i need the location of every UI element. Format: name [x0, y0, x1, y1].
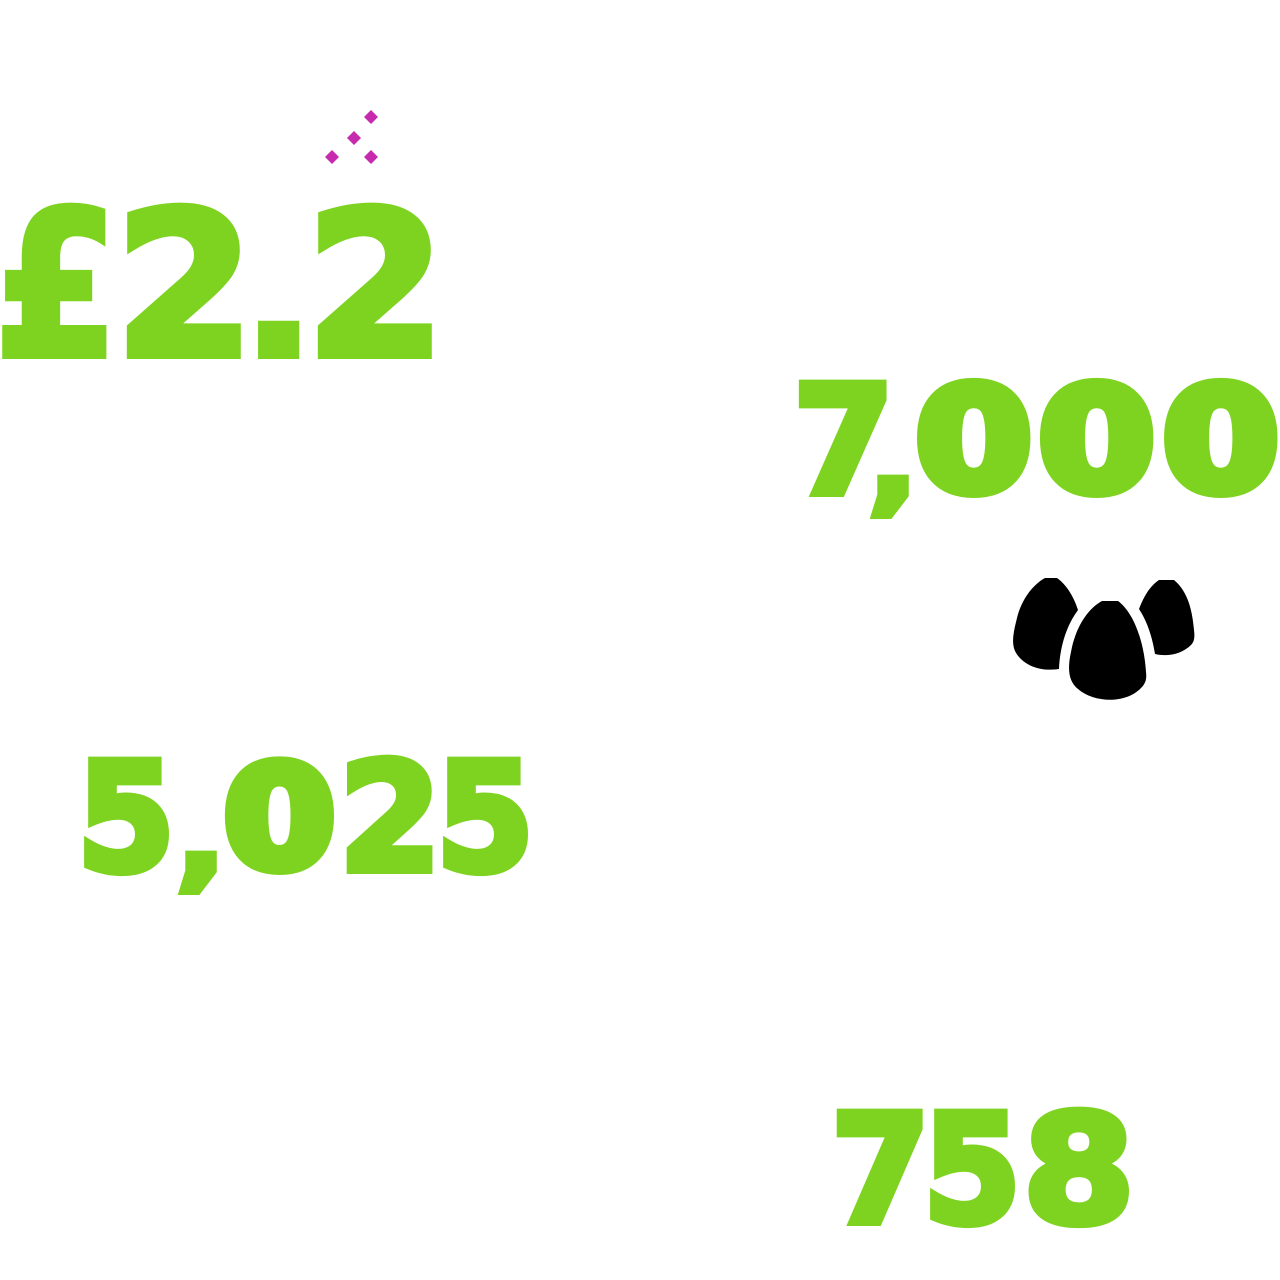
stat: 758: 8: [1023, 1083, 1135, 1258]
stat: 758: [831, 1083, 1135, 1258]
stat: 758: 7: [831, 1083, 930, 1258]
stat: 7,000: 7: [793, 354, 894, 529]
stat: 5,025: 5: [77, 732, 175, 906]
stat: 758: 5: [923, 1084, 1021, 1258]
stat: 5,025: 5: [436, 732, 534, 906]
stat: 5,025: [77, 732, 534, 906]
stat: £2.2: 2: [115, 170, 254, 403]
stat: 7,000: ,: [869, 398, 917, 526]
icon: three eggs: [1013, 578, 1194, 700]
stat: 5,025: 0: [224, 737, 335, 901]
stat: £2.2: .: [244, 208, 313, 393]
stat: £2.2: [0, 170, 445, 403]
stat: 5,025: ,: [177, 774, 225, 902]
stat: 5,025: 2: [339, 732, 441, 906]
stat: 7,000: 000: [916, 357, 1279, 524]
icon: pink diamonds: [325, 110, 378, 164]
stat: £2.2: 2: [306, 170, 445, 403]
